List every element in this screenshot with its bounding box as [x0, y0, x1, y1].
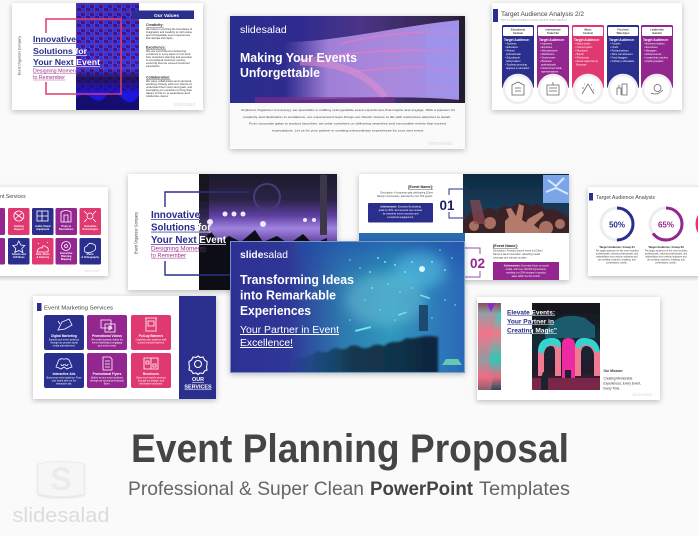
column 2: Trade Fair [547, 32, 559, 35]
tile captions: & Catering [36, 256, 50, 259]
event 01 achievement box [368, 203, 433, 222]
tile: brochures: through our elegant, and [138, 380, 165, 382]
slide heading [33, 34, 100, 67]
main slide: transforming ideas [230, 241, 465, 373]
slide heading: Experiences [240, 303, 311, 318]
column icons [504, 75, 671, 103]
slide subheading: Excellence! [240, 338, 293, 349]
subtitle: Professional & Super Clean [128, 478, 364, 500]
column 5: Target Audience: [643, 38, 669, 42]
values text: and unforgettable event experiences [146, 34, 191, 37]
column 1: Seminar [513, 32, 523, 35]
column 5: • Leadership coaches [644, 56, 669, 60]
subtitle: PowerPoint [370, 478, 473, 500]
services side panel: OUR [192, 377, 204, 383]
slide heading: Solutions for [33, 46, 88, 56]
column 1: • Students pursuing [505, 64, 527, 66]
event 01 text: Name]'s anniversary, attended by over 500 guests. [377, 195, 433, 198]
slide heading: Elevate Events: [507, 310, 555, 316]
tile: digital marketing: through our precise social [50, 342, 78, 344]
photo: glowing fabric [230, 16, 465, 103]
event 01 text [377, 185, 433, 198]
tile captions: Decorations [59, 228, 74, 231]
column 1: policymakers [506, 60, 521, 63]
photo: teal concert crowd [230, 241, 465, 373]
tile: brochures [131, 353, 171, 388]
tile: promotional videos: your event crowd. [98, 344, 117, 348]
slide heading: Solutions for [151, 222, 211, 234]
tile: brochures: informative brochures. [139, 382, 163, 386]
tile: promotional videos: event marketing to engaging [92, 342, 123, 344]
column 2: International [545, 28, 561, 32]
tile: promotional flyers: flyers. [104, 382, 111, 386]
column 5: • Business leaders [644, 42, 665, 46]
column 5: Leadership [650, 28, 664, 32]
column 5 [641, 25, 673, 88]
column 2: representatives [541, 70, 559, 74]
column 4: • Culinary enthusiasts [610, 60, 635, 63]
column 2: • Government [540, 56, 556, 60]
tile captions: Gift Ideas [13, 256, 25, 259]
values text: to exceptional customer service, [146, 59, 186, 62]
values text: ideas to life in a seamless and [146, 92, 191, 95]
tile: promotional videos: We create dynamic videos for [91, 338, 123, 342]
event 02 text: coverage and industry acclaim. [493, 256, 528, 260]
mission text: Creating Memorable [604, 376, 633, 380]
event 02 text: [Event Name]: [493, 244, 518, 248]
column 1: • Retired [505, 50, 515, 52]
intro paragraph [241, 108, 455, 132]
slide heading: Event Marketing Services [44, 306, 113, 312]
tile captions: Technologies [82, 228, 99, 231]
column 2: • Exporters [540, 46, 553, 49]
donut third (cropped) [697, 208, 698, 240]
slide heading: Target Audience Analysis [596, 195, 655, 201]
event 02 achievement box: media, with over 100,000 impressions, [506, 268, 547, 271]
heading bar [37, 303, 42, 311]
tile captions: Equipment [36, 228, 49, 231]
event 01 achievement box: for seamless event execution and [383, 212, 419, 216]
tile captions: & Videography [81, 256, 100, 259]
slide heading: into Remarkable [240, 288, 336, 302]
intro paragraph: expectations. Let us be your partner in creating extraordinary experiences for your next event. [272, 128, 424, 132]
event 02 achievement box: Achievements: Generated buzz on social [504, 264, 549, 268]
tile: digital marketing [44, 315, 84, 350]
number 02: 02 [470, 256, 485, 271]
column 5: • Executives [644, 46, 658, 49]
tile: pull-up banners: Pull-up Banners [139, 334, 163, 338]
column 2: professionals [541, 64, 556, 66]
slide heading: Unforgettable [240, 66, 320, 80]
group 1 text: professionals, industry professionals, and [596, 252, 639, 256]
tile: brochures: Share your brand's essence [136, 376, 167, 380]
event 01 achievement box: Achievements: Exceeded fundraising [380, 206, 421, 208]
event 02 achievement box: sales within the first month. [512, 275, 541, 278]
tile icons [13, 210, 96, 253]
slide heading: Transforming Ideas [240, 272, 354, 287]
event 02 achievement box [493, 262, 559, 280]
tile: promotional flyers: Promotional Flyers [93, 372, 122, 376]
donut 50% [601, 208, 633, 240]
brand logo mark: S [50, 461, 72, 497]
footer watermark: slidesalad [173, 102, 195, 108]
tile: merchandise: interactive ads. [56, 382, 72, 386]
slide: target audience analysis donuts [588, 187, 698, 276]
values text: from meticulous planning and execution [146, 56, 193, 59]
brand logo: slidesalad [240, 24, 287, 36]
group 1 text: stakeholders from various industries and [596, 256, 638, 258]
heading bar [589, 193, 593, 200]
group 2 text: stakeholders from various industries and [645, 256, 687, 258]
column 2: • Business [540, 60, 552, 63]
slide heading: Making Your Events [240, 51, 357, 65]
tile: merchandise: your brand with our fun [52, 380, 77, 382]
values text: collaborative manner. [146, 95, 169, 98]
slide heading [240, 272, 354, 318]
column 4: • Chefs [610, 46, 619, 49]
values band [132, 10, 194, 19]
column 3: • Concert-goers [575, 46, 593, 49]
tile: promotional flyers: through our special promotional [90, 380, 124, 382]
tile captions: Planning [61, 255, 72, 258]
values text: imagination and creativity to craft unique [146, 31, 193, 34]
intro paragraph: creativity and dedication to excellence, our experienced team brings our clients' visions to life with meticulous attention to detail. [243, 115, 451, 119]
event 02 text [493, 244, 543, 260]
column 2: • Importers [540, 42, 553, 46]
column 5: Summit [652, 32, 662, 35]
intro paragraph: At [Event Organizer Company], we specialize in crafting unforgettable event experiences that inspire and engage. With a passion for [241, 108, 455, 112]
event 01 achievement box: goals by 30%, and received rave reviews [379, 209, 423, 212]
mission text [604, 369, 641, 390]
group 2 text: presentation, and/or. [656, 262, 677, 264]
column 2 [537, 25, 569, 88]
group 2 text: Target Audience: Group 02 [648, 245, 684, 249]
values text: Collaboration: [146, 76, 170, 80]
column 1: degrees in education [506, 67, 530, 70]
event 01 text: Description: A corporate gala celebrating [Client [380, 192, 433, 194]
column 4: Target Audience: [609, 38, 635, 42]
footer watermark: slidesalad [84, 269, 100, 273]
column 3 [572, 25, 604, 88]
slide subheading: Here are some examples of events and their target audiences [501, 18, 568, 22]
column 5: • Managers [644, 50, 657, 52]
slide subheading: Designing Moments [33, 68, 80, 74]
slide: making your events unforgettable [230, 16, 465, 149]
slide subheading: to Remember [33, 75, 65, 81]
group 1 text: presentation, and/or. [607, 262, 628, 264]
slide heading: Innovative [33, 34, 76, 44]
values text: excellence in every aspect of our work, [146, 53, 191, 56]
tile captions: Innovative [84, 225, 97, 228]
donut 50%: 50% [609, 220, 625, 230]
column 3: Target Audience: [574, 38, 600, 42]
tile captions: Music [87, 253, 94, 256]
tile: pull-up banners: Captivate your audience with [136, 338, 167, 342]
slide heading [507, 310, 557, 334]
subtitle [128, 478, 570, 500]
tile: merchandise: Interactive Ads [53, 372, 76, 376]
slide: elevate events [477, 297, 660, 400]
values text: working closely with our clients to [146, 83, 193, 86]
values text: understand their vision and goals, and [146, 86, 193, 89]
slide: event marketing services [33, 296, 216, 399]
column 3: • Musicians [575, 50, 588, 52]
group 1 text: Target Audience: Group 01 [599, 245, 635, 249]
values text [146, 23, 193, 98]
slide subheading [33, 68, 80, 81]
tile: merchandise [44, 353, 84, 388]
values text: expectations. [146, 65, 160, 68]
slide heading: Creating Magic" [507, 328, 557, 334]
tile: promotional flyers: Deliver to your event audience [91, 376, 124, 380]
column 3: • Performers [575, 56, 590, 60]
tile captions: Interactive [60, 252, 73, 255]
tile: digital marketing: Expand your event audience [49, 338, 80, 342]
column 1: professionals [506, 53, 521, 56]
intro paragraph: From corporate galas to product launches, we pride ourselves on delivering seamless and memorable events that exceed [249, 122, 446, 126]
brand logo: slidesalad [240, 249, 288, 261]
slide subheading: to Remember [151, 254, 186, 260]
tile captions: Support [14, 228, 24, 231]
tile captions: Awards and [12, 253, 26, 256]
column 3: Festival [583, 32, 593, 35]
column 2: • Government trade [540, 67, 562, 70]
column 2: • Distributors [540, 53, 555, 56]
photo: neon arches [532, 303, 600, 390]
lower left photo strip [359, 233, 465, 242]
donut 65%: 65% [658, 220, 674, 230]
group 2 text: The target audience for the event includes [645, 250, 688, 252]
values text: leveraging our expertise to bring their [146, 89, 192, 92]
values text: We are committed to delivering [146, 50, 187, 53]
blue frame [165, 192, 249, 275]
rotated company label: Event Organizer Company [134, 211, 138, 254]
column 4: • Wine connoisseurs [610, 53, 633, 56]
tile captions: Catering [14, 225, 24, 228]
brand wordmark: slidesalad [12, 505, 110, 527]
event 02 text: Name]'s latest innovation, attracting media [493, 253, 541, 256]
slide heading: Your Partner in [507, 318, 554, 326]
column 2: Target Audience: [539, 38, 565, 42]
column 3: • Bands [575, 53, 584, 56]
number 01: 01 [440, 198, 455, 213]
slide: event portfolio 01 02 [359, 174, 569, 280]
tile captions: Props & [61, 225, 71, 228]
slide heading: Innovative [151, 210, 200, 221]
services side panel [179, 296, 216, 399]
slide subheading: Designing Moments [151, 246, 206, 252]
column 3: Music [584, 28, 592, 32]
event 01 text: [Event Name]: [408, 185, 433, 189]
slide heading [151, 210, 227, 246]
tile: pull-up banners [131, 315, 171, 350]
column 1: • Educators [505, 46, 519, 49]
tile: pull-up banners: custom branded banners. [137, 342, 165, 344]
photo: blue hexagon ceiling [76, 3, 139, 110]
photo: left neon arch crop [478, 303, 501, 390]
values text: ensuring that we exceed customer [146, 62, 190, 65]
tile: promotional videos [87, 315, 127, 350]
event 02 achievement box: resulting in a 25% increase in product [506, 272, 546, 274]
tile captions: Audio-Visual [35, 225, 51, 228]
values text: Excellence: [146, 46, 166, 50]
tile captions [12, 225, 100, 261]
column 2: • Manufacturers [540, 50, 558, 52]
slide: event services (cropped) [0, 187, 108, 276]
slide subheading [240, 325, 339, 349]
column 3: • Event organizers & [575, 60, 598, 63]
slide heading: Target Audience Analysis 2/2 [501, 11, 584, 18]
column 1: Educational [511, 28, 525, 32]
slide: our values [12, 3, 203, 110]
service tiles [0, 208, 101, 264]
slide: innovative solutions concert [128, 174, 337, 290]
tile: digital marketing: Digital Marketing [51, 334, 77, 338]
subtitle: Templates [479, 478, 570, 500]
tile: promotional flyers [87, 353, 127, 388]
column 4: Food and [617, 28, 629, 32]
tile: promotional videos: Promotional Videos [92, 334, 122, 338]
donut 65% [650, 208, 682, 240]
tile captions: Date, Music [36, 253, 50, 256]
heading bar [493, 9, 498, 22]
group 1 text: The target audience for this event includes [595, 250, 639, 252]
frame 01 [449, 189, 467, 218]
photo: crowd with raised hands [463, 174, 569, 235]
column 1: • Educational [505, 56, 520, 60]
column 5: • Entrepreneurs [644, 53, 662, 56]
main title: Event Planning Proposal [131, 427, 569, 471]
tile: digital marketing: media advertisement. [53, 344, 76, 348]
tile captions: Mapping [61, 258, 72, 261]
group 2 text: are seeking, business, breaking, and [647, 258, 685, 262]
tile: brochures: Brochures [143, 372, 159, 376]
values text: that captivate and inspire. [146, 37, 174, 40]
values text: Creativity: [146, 23, 164, 27]
values text: We believe in pushing the boundaries of [146, 28, 192, 31]
column 1: • Students [505, 42, 517, 46]
frame 02 [465, 248, 480, 277]
slide heading [240, 51, 357, 80]
values text: We value collaboration and teamwork, [146, 80, 192, 83]
photo: purple concert [199, 174, 337, 290]
event 01 achievement box: exceptional engagement. [387, 216, 414, 219]
event 02 text: Description: Assisted launch event for [Client [493, 250, 543, 252]
column 4 [607, 25, 639, 88]
icon glyphs [512, 82, 663, 95]
mission text: Our Mission [604, 369, 623, 373]
column 3: • Music lovers [575, 42, 591, 46]
group 2 text: professionals, industry professionals, and [645, 252, 688, 256]
footer watermark: slidesalad [632, 392, 653, 397]
column 4: Wine Expo [617, 32, 630, 35]
slide heading: Your Next Event [151, 235, 227, 246]
slide heading: Your Next Event [33, 57, 100, 67]
slide subheading [151, 246, 206, 260]
column 4: • Restauranteurs [610, 50, 629, 52]
tile: merchandise: Boost your event audience. Fuse [47, 376, 82, 380]
column 1: Target Audience: [504, 38, 530, 42]
column 5: • Aspiring leaders [644, 60, 664, 63]
footer watermark: slidesalad [428, 141, 452, 147]
pink frame [46, 19, 121, 94]
rotated company label: Event Organizer Company [18, 36, 22, 75]
values band: Our Values [154, 13, 179, 19]
group 2 text [645, 245, 688, 264]
slide subheading: Your Partner in Event [240, 325, 339, 336]
slide heading: nt Services [0, 194, 26, 200]
mission text: Every Time [604, 386, 620, 390]
column 3: Sponsors [576, 64, 587, 66]
column 4: • Foodies [610, 42, 621, 46]
services side panel: SERVICES [184, 384, 212, 390]
column 4: • Food bloggers [610, 56, 628, 60]
mission text: Experiences, Every Event, [604, 382, 641, 386]
brand logo mark [38, 461, 84, 497]
column 1 [502, 25, 534, 88]
group 1 text [595, 245, 639, 264]
group 1 text: are seeking, business, breaking, and [598, 258, 636, 262]
slide: target audience analysis 2/2 [492, 3, 682, 110]
